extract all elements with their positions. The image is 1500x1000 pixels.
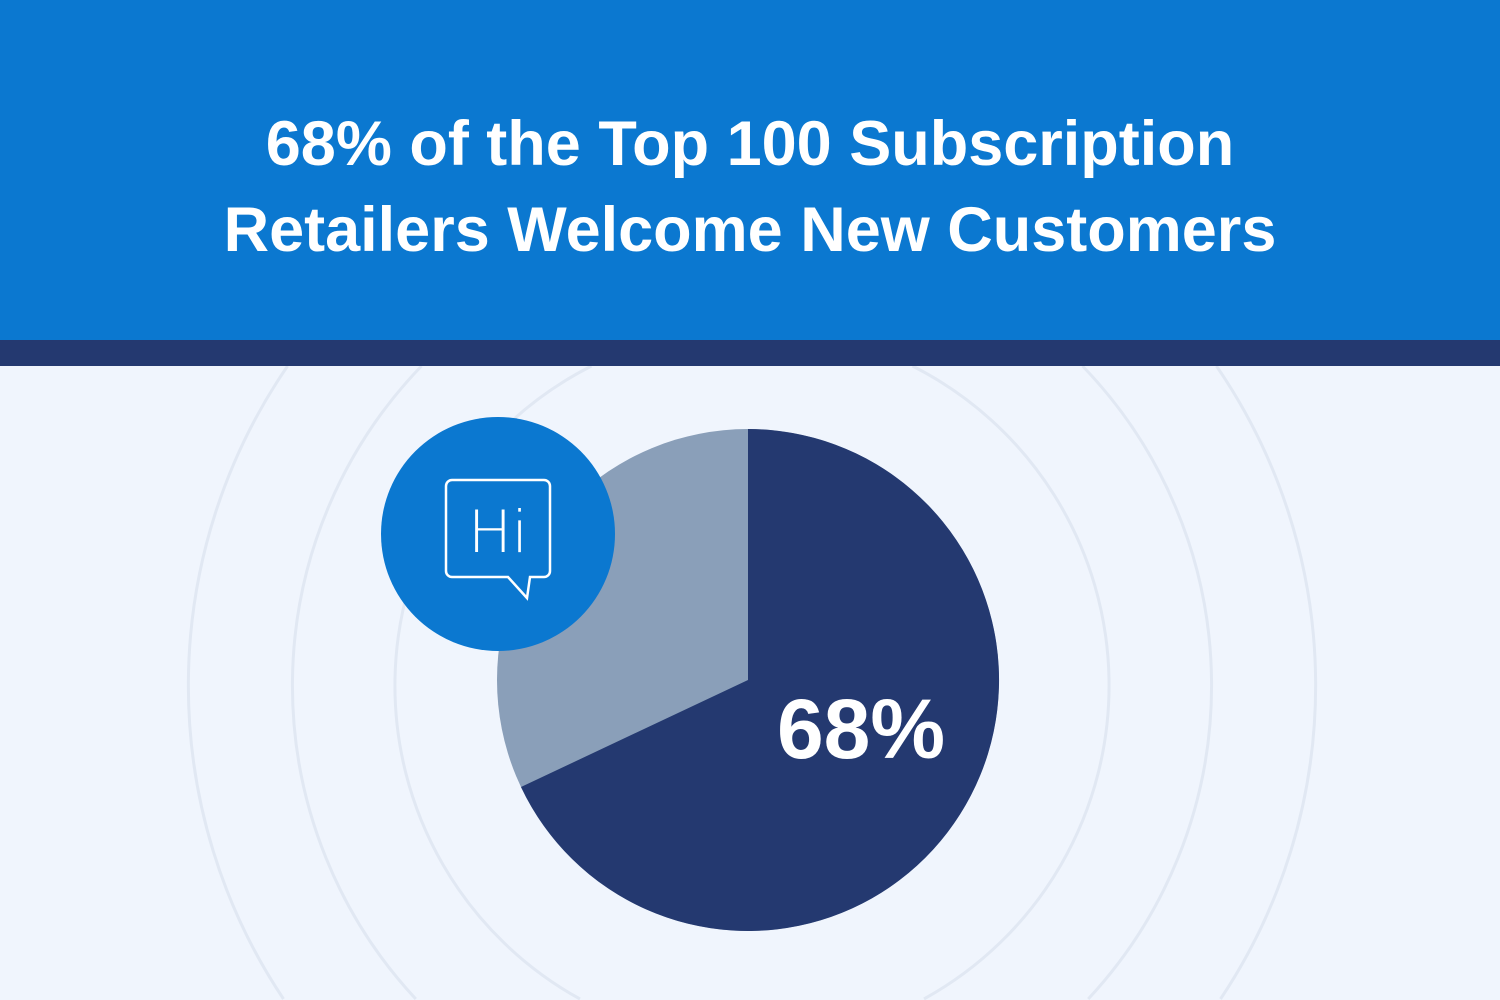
title <box>224 109 1276 265</box>
pie label: 68% <box>777 682 945 776</box>
title: 68% of the Top 100 Subscription <box>266 109 1234 179</box>
pie chart <box>497 429 999 931</box>
icon: speech bubble Hi <box>381 417 615 651</box>
header band <box>0 340 1500 366</box>
title: Retailers Welcome New Customers <box>224 195 1276 265</box>
header <box>0 0 1500 340</box>
icon: speech bubble Hi: Hi <box>468 498 528 566</box>
